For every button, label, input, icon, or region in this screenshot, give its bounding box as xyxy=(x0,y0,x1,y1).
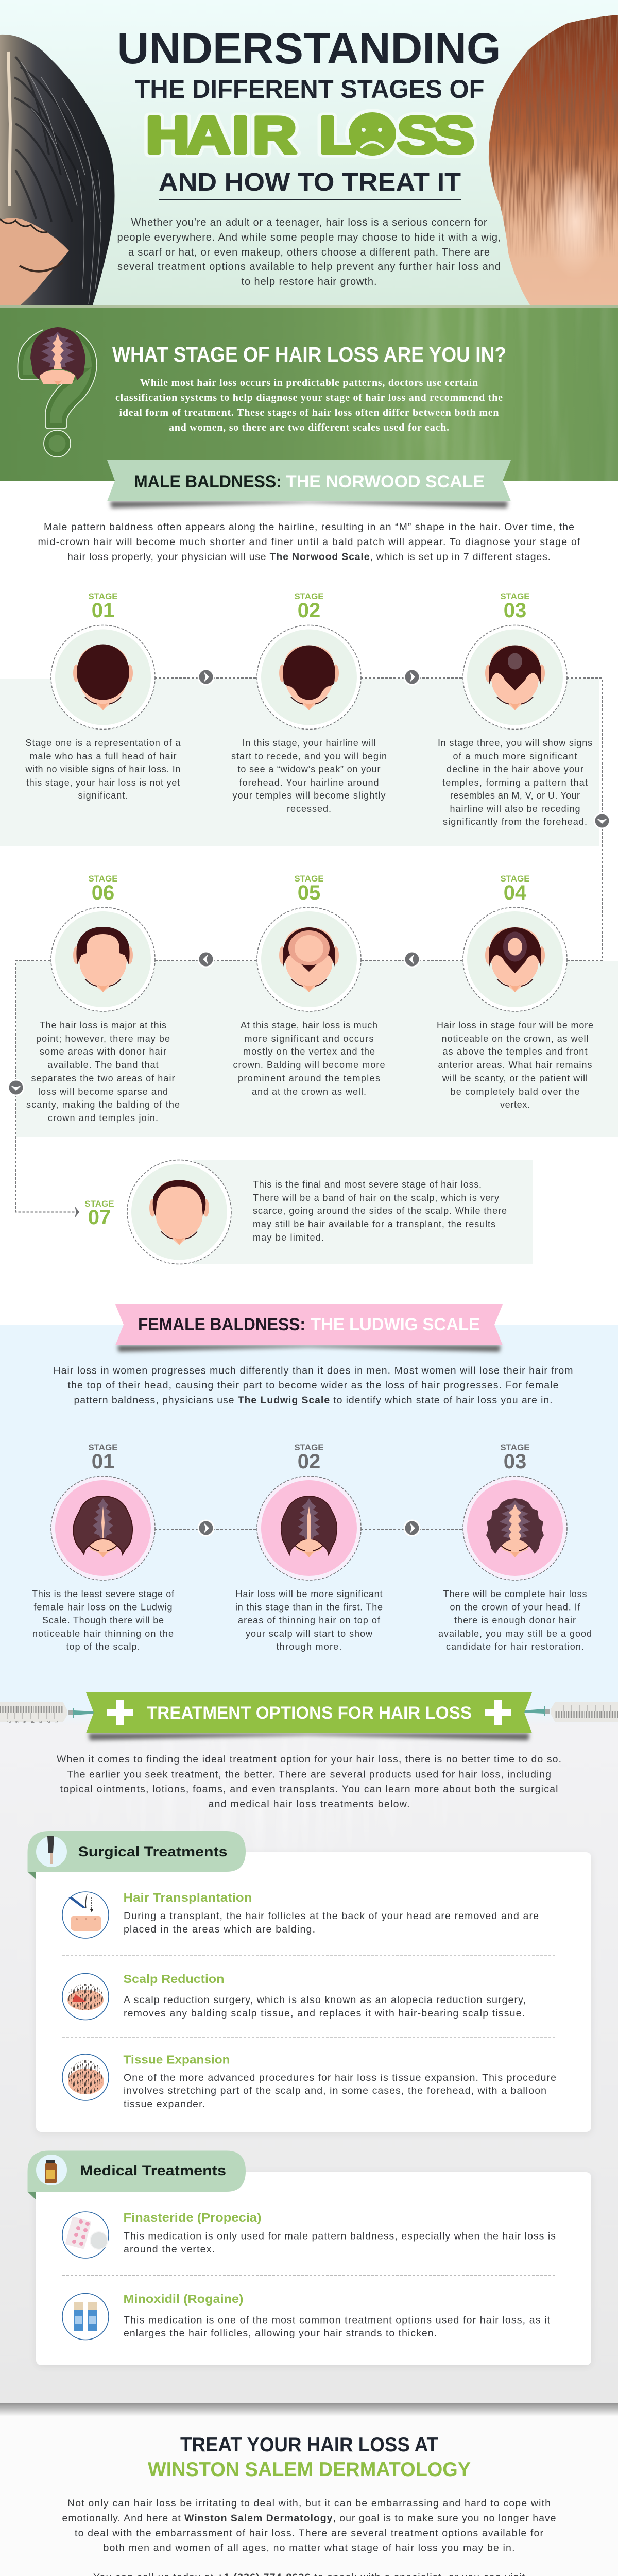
title: THE DIFFERENT STAGES OF xyxy=(135,75,484,104)
stage number: STAGE xyxy=(294,591,324,601)
icon: wide thinning crown xyxy=(463,1476,567,1580)
treatment intro text: The earlier you seek treatment, the better. There are several products used for hair loss, including xyxy=(67,1769,551,1781)
description: Scale. Though there will be xyxy=(42,1615,164,1625)
stage number xyxy=(500,591,530,622)
item: tissue expansion: Tissue Expansion xyxy=(124,2053,230,2066)
description: areas of thinning hair on top of xyxy=(238,1615,381,1625)
stage number: 03 xyxy=(504,599,526,622)
item: finasteride: Finasteride (Propecia) xyxy=(124,2211,262,2224)
photo: woman's hair part xyxy=(0,31,118,309)
item: tissue expansion xyxy=(62,2053,556,2110)
call to action heading: WINSTON SALEM DERMATOLOGY xyxy=(148,2459,471,2481)
item: tissue expansion: One of the more advanced procedures for hair loss is tissue expansion. This procedure xyxy=(124,2072,556,2083)
description: more significant and occurs xyxy=(244,1033,374,1044)
description xyxy=(438,1589,592,1652)
stage number: STAGE xyxy=(294,1443,324,1452)
background bands xyxy=(0,679,599,846)
item: minoxidil: enlarges the hair follicles, allowing your hair strands to thicken. xyxy=(124,2328,437,2339)
item: scalp reduction: Scalp Reduction xyxy=(124,1972,225,1986)
description: significant. xyxy=(78,790,128,801)
panel: what stage of hair loss xyxy=(0,305,618,481)
item: hair transplantation: placed in the areas which are balding. xyxy=(124,1924,315,1935)
description: and at the crown as well. xyxy=(252,1087,366,1097)
description: start to recede, and you will begin xyxy=(231,751,387,761)
description: top of the scalp. xyxy=(66,1641,140,1652)
icon: M-shaped hairline xyxy=(463,625,567,730)
icon: question mark with thinning hair xyxy=(18,327,97,457)
description: In stage three, you will show signs xyxy=(438,738,592,748)
tab heading xyxy=(28,2150,246,2192)
title: AND HOW TO TREAT IT xyxy=(159,168,461,196)
description: crown. Balding will become more xyxy=(233,1060,385,1070)
female stage 03 xyxy=(438,1443,592,1652)
intro paragraph: a scarf or hat, or even makeup, others choose a different path. There are xyxy=(128,247,490,258)
call to action heading xyxy=(148,2434,471,2481)
description: noticeable on the crown, as well xyxy=(442,1033,588,1044)
description: this stage, your hair loss is not yet xyxy=(26,777,180,788)
icon: left syringe xyxy=(0,1702,94,1723)
icon: surgical punch xyxy=(36,1836,67,1867)
stage number xyxy=(294,874,324,904)
stage 05 xyxy=(233,874,385,1097)
male baldness intro text: Male pattern baldness often appears along the hairline, resulting in an “M” shape in the hair. Over time, the xyxy=(44,521,574,533)
description: significantly from the forehead. xyxy=(443,817,587,827)
item: finasteride xyxy=(62,2211,556,2258)
panel: medical treatments xyxy=(28,2150,591,2365)
panel: what stage of hair loss: classification systems to help diagnose your stage of hair loss and recommend the xyxy=(115,392,503,403)
stage number xyxy=(88,591,118,622)
female stage 02 xyxy=(235,1443,383,1652)
call to action text: Not only can hair loss be irritating to deal with, but it can be embarrassing and hard to cope with xyxy=(67,2498,551,2509)
icon: hair transplant tweezers xyxy=(62,1892,109,1938)
female connector path xyxy=(154,1520,464,1536)
description: resembles an M, V, or U. Your xyxy=(450,790,580,801)
description: Hair loss will be more significant xyxy=(236,1589,382,1599)
icon: plus right xyxy=(485,1700,511,1725)
icon: medicine bottle xyxy=(36,2155,67,2185)
treatment section background xyxy=(0,1721,618,2403)
description: noticeable hair thinning on the xyxy=(32,1629,174,1639)
description: forehead. Your hairline around xyxy=(239,777,379,788)
connector path between stages xyxy=(7,669,611,1218)
description: Hair loss in stage four will be more xyxy=(437,1020,593,1030)
stage number: STAGE xyxy=(84,1199,114,1209)
stage number: 02 xyxy=(298,1450,320,1473)
female baldness intro text xyxy=(54,1365,573,1406)
description xyxy=(438,738,592,827)
icon: scalp reduction xyxy=(62,1973,109,2020)
icon: left syringe: 3 xyxy=(38,1721,43,1723)
treatment intro text: topical ointments, lotions, foams, and even transplants. You can learn more about both the surgical xyxy=(60,1784,558,1795)
stage number: 01 xyxy=(92,1450,114,1473)
heading ribbon: treatment options xyxy=(86,1692,532,1740)
description: female hair loss on the Ludwig xyxy=(34,1602,172,1613)
icon: tissue expansion xyxy=(62,2054,109,2100)
item: tissue expansion: involves stretching part of the scalp and, in some cases, the forehead, with a balloon xyxy=(124,2085,546,2096)
description: loss will become sparse and xyxy=(38,1087,168,1097)
description xyxy=(32,1589,175,1652)
title: UNDERSTANDING xyxy=(117,24,501,73)
description: there is enough donor hair xyxy=(454,1615,576,1625)
call to action text: both men and women of all ages, no matter what stage of hair loss you may be in. xyxy=(103,2542,515,2553)
icon: thin band of hair xyxy=(127,1160,231,1264)
item: scalp reduction: removes any balding scalp tissue, and replaces it with hair-bearing scalp tissue. xyxy=(124,2008,525,2019)
panel: what stage of hair loss: ideal form of treatment. These stages of hair loss often differ between both men xyxy=(119,407,499,418)
icon: left syringe: 5 xyxy=(22,1721,27,1723)
heading ribbon: male baldness: THE NORWOOD SCALE xyxy=(286,472,485,492)
description: anterior areas. What hair remains xyxy=(438,1060,592,1070)
description: in this stage than in the first. The xyxy=(235,1602,383,1613)
icon: full head of hair xyxy=(51,625,155,730)
icon: large bald crown xyxy=(257,907,361,1011)
item: finasteride: This medication is only used for male pattern baldness, especially when the hair loss is xyxy=(124,2231,556,2242)
description: through more. xyxy=(276,1641,342,1652)
icon: ampoules xyxy=(62,2294,109,2340)
description xyxy=(235,1589,383,1652)
stage 03 xyxy=(438,591,592,827)
description xyxy=(233,1020,385,1097)
female baldness intro text: Hair loss in women progresses much differently than it does in men. Most women will lose their hair from xyxy=(54,1365,573,1377)
icon: band of hair xyxy=(51,907,155,1011)
stage number xyxy=(88,1443,118,1473)
treatment intro text: When it comes to finding the ideal treatment option for your hair loss, there is no better time to do so. xyxy=(57,1754,561,1765)
stage number: STAGE xyxy=(88,874,118,884)
description: candidate for hair restoration. xyxy=(446,1641,584,1652)
stage number xyxy=(88,874,118,904)
heading ribbon: female baldness: THE LUDWIG SCALE xyxy=(311,1315,480,1334)
stage number: 02 xyxy=(298,599,320,622)
description: to see a “widow’s peak” on your xyxy=(238,764,380,774)
stage number xyxy=(294,591,324,622)
header background xyxy=(0,0,618,305)
icon: left syringe: 7 xyxy=(6,1721,11,1723)
description: mostly on the vertex and the xyxy=(243,1046,375,1057)
call to action text xyxy=(62,2498,556,2553)
sad face in the letter O xyxy=(349,112,396,156)
stage number: STAGE xyxy=(500,1443,530,1452)
description: scanty, making the balding of the xyxy=(26,1099,180,1110)
description: your scalp will start to show xyxy=(246,1629,373,1639)
stage number: 01 xyxy=(92,599,114,622)
description: There will be a band of hair on the scalp, which is very xyxy=(253,1193,499,1203)
item: scalp reduction xyxy=(62,1972,526,2020)
stage 01 xyxy=(25,591,181,801)
description: may be limited. xyxy=(253,1232,324,1243)
item: tissue expansion: tissue expander. xyxy=(124,2098,205,2110)
item: scalp reduction: A scalp reduction surgery, which is also known as an alopecia reduction surgery, xyxy=(124,1994,526,2006)
item: finasteride: around the vertex. xyxy=(124,2244,215,2255)
icon: thin part line xyxy=(51,1476,155,1580)
item: hair transplantation xyxy=(62,1891,539,1938)
description: separates the two areas of hair xyxy=(31,1073,175,1083)
description: of a much more significant xyxy=(453,751,577,761)
photo: man's balding head xyxy=(484,10,618,307)
description: At this stage, hair loss is much xyxy=(241,1020,377,1030)
treatment panel bottom edge xyxy=(0,2385,618,2416)
description: scarce, going around the sides of the scalp. While there xyxy=(253,1206,507,1216)
stage number: 07 xyxy=(88,1206,111,1229)
stage 04 xyxy=(437,874,593,1110)
stage number xyxy=(84,1199,114,1229)
stage 06 xyxy=(26,874,180,1123)
description xyxy=(26,1020,180,1123)
intro paragraph: to help restore hair growth. xyxy=(241,276,377,287)
stage 07 xyxy=(84,1160,507,1264)
icon: right syringe xyxy=(524,1702,618,1722)
call to action text: emotionally. And here at Winston Salem Dermatology, our goal is to make sure you no longer have xyxy=(62,2513,556,2524)
description: your temples will become slightly xyxy=(233,790,385,801)
intro paragraph: people everywhere. And while some people may choose to hide it with a wig, xyxy=(117,232,501,243)
stage number: STAGE xyxy=(294,874,324,884)
stage number: 06 xyxy=(92,882,114,904)
stage number xyxy=(500,874,530,904)
description: be completely bald over the xyxy=(450,1087,580,1097)
title xyxy=(117,24,501,196)
panel: what stage of hair loss: While most hair loss occurs in predictable patterns, doctors use certain xyxy=(140,377,478,388)
description: vertex. xyxy=(500,1099,530,1110)
heading ribbon: female baldness: FEMALE BALDNESS: xyxy=(138,1315,305,1334)
description: will be scanty, or the patient will xyxy=(442,1073,588,1083)
title: HAIR LOSS xyxy=(146,107,474,164)
stage number: 03 xyxy=(504,1450,526,1473)
call to action heading: TREAT YOUR HAIR LOSS AT xyxy=(180,2434,438,2456)
treatment intro text xyxy=(57,1754,561,1810)
stage number xyxy=(294,1443,324,1473)
female baldness intro text: the top of their head, causing their part to become wider as the loss of hair progresses. For female xyxy=(68,1380,558,1391)
description xyxy=(253,1179,507,1243)
heading ribbon: treatment options: TREATMENT OPTIONS FOR HAIR LOSS xyxy=(147,1703,472,1723)
panel: what stage of hair loss: WHAT STAGE OF HAIR LOSS ARE YOU IN? xyxy=(112,343,506,366)
male baldness intro text: mid-crown hair will become much shorter and finer until a bald patch will appear. To diagnose your stage of xyxy=(38,536,580,548)
tab heading xyxy=(28,1831,246,1872)
item: minoxidil: This medication is one of the most common treatment options used for hair loss, as it xyxy=(124,2314,551,2326)
description: available, you may still be a good xyxy=(438,1629,592,1639)
description: decline in the hair above your xyxy=(447,764,583,774)
item: hair transplantation: Hair Transplantation xyxy=(124,1891,252,1904)
description xyxy=(437,1020,593,1110)
intro paragraph xyxy=(117,217,501,287)
item: hair transplantation: During a transplant, the hair follicles at the back of your head are removed and are xyxy=(124,1910,539,1922)
treat section background xyxy=(0,2403,618,2576)
description: available. The band that xyxy=(47,1060,159,1070)
heading ribbon: female baldness xyxy=(115,1304,503,1352)
heading ribbon: male baldness xyxy=(107,460,511,508)
icon: left syringe: 1 xyxy=(54,1721,59,1723)
stage number: 05 xyxy=(298,882,320,904)
description: with no visible signs of hair loss. In xyxy=(25,764,180,774)
stage number: STAGE xyxy=(500,874,530,884)
description: point; however, there may be xyxy=(36,1033,170,1044)
description: some areas with donor hair xyxy=(40,1046,166,1057)
description: There will be complete hair loss xyxy=(443,1589,587,1599)
panel: surgical treatments xyxy=(28,1831,591,2132)
male baldness intro text xyxy=(38,521,580,563)
intro paragraph: Whether you’re an adult or a teenager, hair loss is a serious concern for xyxy=(131,217,487,228)
tab heading: Surgical Treatments xyxy=(78,1844,228,1859)
stage 02 xyxy=(231,591,387,814)
description: prominent around the temples xyxy=(238,1073,380,1083)
description: In this stage, your hairline will xyxy=(242,738,376,748)
stage number: STAGE xyxy=(88,1443,118,1452)
icon: plus left xyxy=(107,1700,133,1725)
heading ribbon: male baldness: MALE BALDNESS: xyxy=(134,472,282,492)
icon: left syringe: 4 xyxy=(30,1721,35,1723)
intro paragraph: several treatment options available to help prevent any further hair loss and xyxy=(117,261,501,273)
description: as above the temples and front xyxy=(443,1046,587,1057)
title: HAIR LOSS xyxy=(146,107,474,164)
description: hairline will also be receding xyxy=(450,804,580,814)
female stage 01 xyxy=(32,1443,175,1652)
icon: left syringe: 2 xyxy=(46,1721,51,1723)
description: recessed. xyxy=(287,804,331,814)
call to action text: to deal with the embarrassment of hair loss. There are several treatment options available for xyxy=(75,2528,544,2539)
stage number: STAGE xyxy=(88,591,118,601)
female section background xyxy=(0,1325,618,1726)
tab heading: Medical Treatments xyxy=(80,2163,226,2178)
description: The hair loss is major at this xyxy=(40,1020,166,1030)
female baldness intro text: pattern baldness, physicians use The Ludwig Scale to identify which state of hair loss you are in. xyxy=(74,1395,552,1406)
icon: small bald crown xyxy=(463,907,567,1011)
description: male who has a full head of hair xyxy=(30,751,176,761)
description: This is the final and most severe stage of hair loss. xyxy=(253,1179,482,1190)
stage number xyxy=(500,1443,530,1473)
description: on the crown of your head. If xyxy=(450,1602,580,1613)
male baldness intro text: hair loss properly, your physician will use The Norwood Scale, which is set up in 7 different stages. xyxy=(67,551,551,563)
icon: left syringe: 6 xyxy=(14,1721,19,1723)
treatment intro text: and medical hair loss treatments below. xyxy=(208,1799,410,1810)
description xyxy=(231,738,387,814)
description: temples, forming a pattern that xyxy=(442,777,588,788)
description: Stage one is a representation of a xyxy=(26,738,181,748)
item: minoxidil xyxy=(62,2292,551,2340)
description: crown and temples join. xyxy=(48,1113,158,1123)
description: may still be hair available for a transplant, the results xyxy=(253,1219,495,1229)
stage number: 04 xyxy=(504,882,527,904)
icon: pill blister xyxy=(62,2212,109,2258)
panel: what stage of hair loss: and women, so there are two different scales used for each. xyxy=(169,422,449,433)
description xyxy=(25,738,181,801)
icon: wider part line xyxy=(257,1476,361,1580)
icon: receding temples xyxy=(257,625,361,730)
description: This is the least severe stage of xyxy=(32,1589,175,1599)
stage number: STAGE xyxy=(500,591,530,601)
item: minoxidil: Minoxidil (Rogaine) xyxy=(124,2292,243,2306)
